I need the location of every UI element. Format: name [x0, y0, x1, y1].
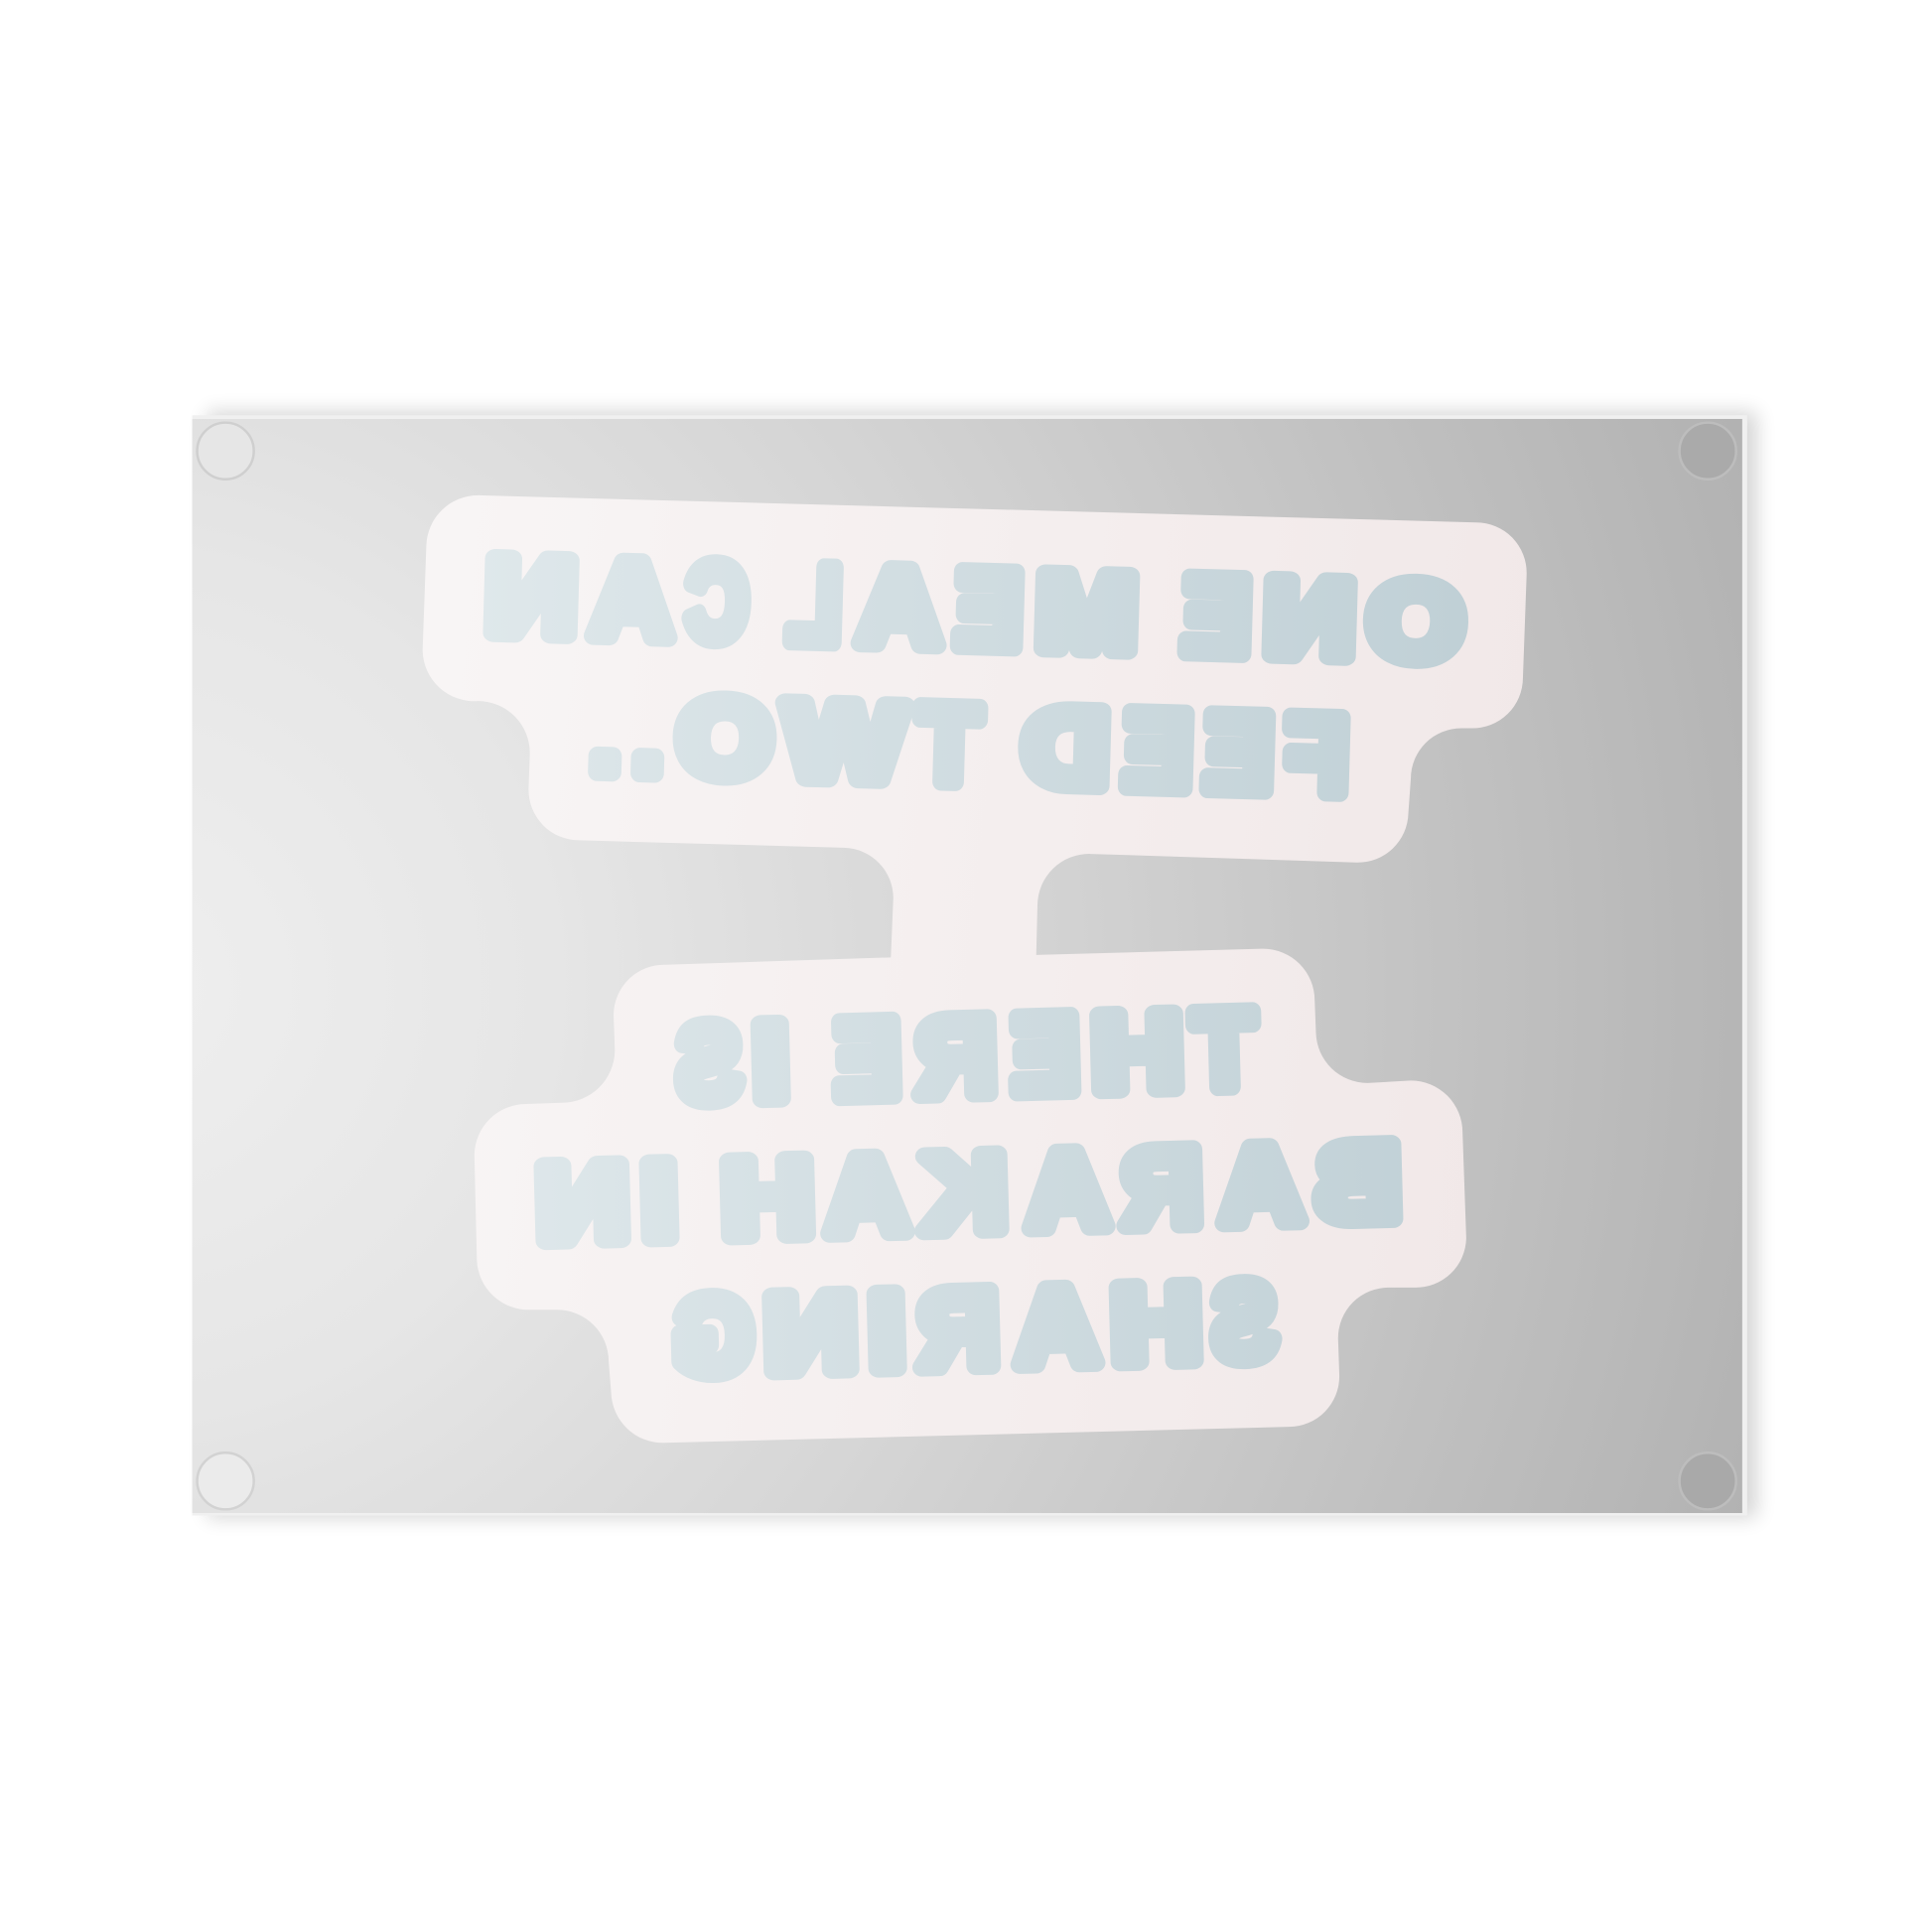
line: SHARING: N	[763, 1272, 858, 1395]
line: SHARING: H	[1110, 1263, 1202, 1386]
line: ONE MEAL CAN: C	[685, 541, 750, 664]
line: FEED TWO..: D	[1022, 687, 1110, 810]
line: THERE IS: T	[1191, 989, 1256, 1111]
line: BARAKAH IN: A	[824, 1134, 909, 1257]
line: THERE IS	[675, 989, 1256, 1125]
line: THERE IS: R	[915, 996, 997, 1119]
line: SHARING: S	[1211, 1261, 1278, 1384]
line: THERE IS: S	[675, 1002, 743, 1125]
mirrored message text	[484, 535, 1464, 1398]
line: ONE MEAL CAN: E	[1181, 555, 1252, 678]
line: ONE MEAL CAN: N	[484, 535, 578, 659]
sticker shape	[423, 495, 1527, 1443]
standoff: bottom left	[198, 1452, 254, 1509]
line: FEED TWO..: W	[783, 680, 905, 804]
standoff: top right	[1680, 423, 1736, 480]
line: SHARING: G	[671, 1275, 754, 1398]
line: THERE IS: E	[833, 998, 901, 1121]
line: BARAKAH IN: N	[535, 1142, 629, 1265]
line: SHARING: R	[917, 1268, 1000, 1391]
line: ONE MEAL CAN: A	[590, 538, 674, 661]
line: FEED TWO..: .	[589, 674, 622, 796]
line: BARAKAH IN: K	[920, 1132, 1008, 1255]
line: BARAKAH IN: R	[1121, 1127, 1203, 1250]
line: ONE MEAL CAN: L	[786, 544, 843, 666]
line: BARAKAH IN: A	[1218, 1124, 1304, 1247]
line: ONE MEAL CAN: N	[1263, 557, 1356, 681]
line: FEED TWO..	[589, 674, 1349, 817]
line: FEED TWO..: O	[676, 677, 773, 800]
glass board edge	[193, 415, 1747, 1516]
standoff: bottom right	[1680, 1452, 1736, 1509]
line: BARAKAH IN: B	[1313, 1121, 1402, 1245]
line: ONE MEAL CAN: M	[1035, 551, 1139, 675]
line: FEED TWO..: .	[631, 676, 665, 797]
line: ONE MEAL CAN: A	[857, 546, 942, 669]
line: BARAKAH IN: H	[721, 1137, 814, 1260]
line: ONE MEAL CAN	[484, 535, 1464, 684]
board shadow	[207, 412, 1757, 1518]
line: THERE IS: I	[752, 1001, 789, 1123]
line: FEED TWO..: E	[1203, 692, 1275, 814]
board surface	[193, 419, 1742, 1513]
line: BARAKAH IN: I	[640, 1140, 678, 1262]
line: THERE IS: H	[1091, 991, 1183, 1114]
line: BARAKAH IN: A	[1026, 1129, 1110, 1252]
line: THERE IS: E	[1011, 993, 1080, 1116]
line: FEED TWO..: T	[917, 684, 982, 806]
line: BARAKAH IN	[535, 1121, 1402, 1265]
line: ONE MEAL CAN: E	[954, 548, 1024, 671]
line: FEED TWO..: E	[1122, 689, 1193, 812]
line: SHARING	[671, 1261, 1278, 1398]
line: SHARING: I	[868, 1271, 905, 1393]
line: SHARING: A	[1015, 1266, 1099, 1389]
line: ONE MEAL CAN: O	[1366, 560, 1464, 684]
line: FEED TWO..: F	[1285, 694, 1349, 817]
standoff: top left	[198, 423, 254, 480]
